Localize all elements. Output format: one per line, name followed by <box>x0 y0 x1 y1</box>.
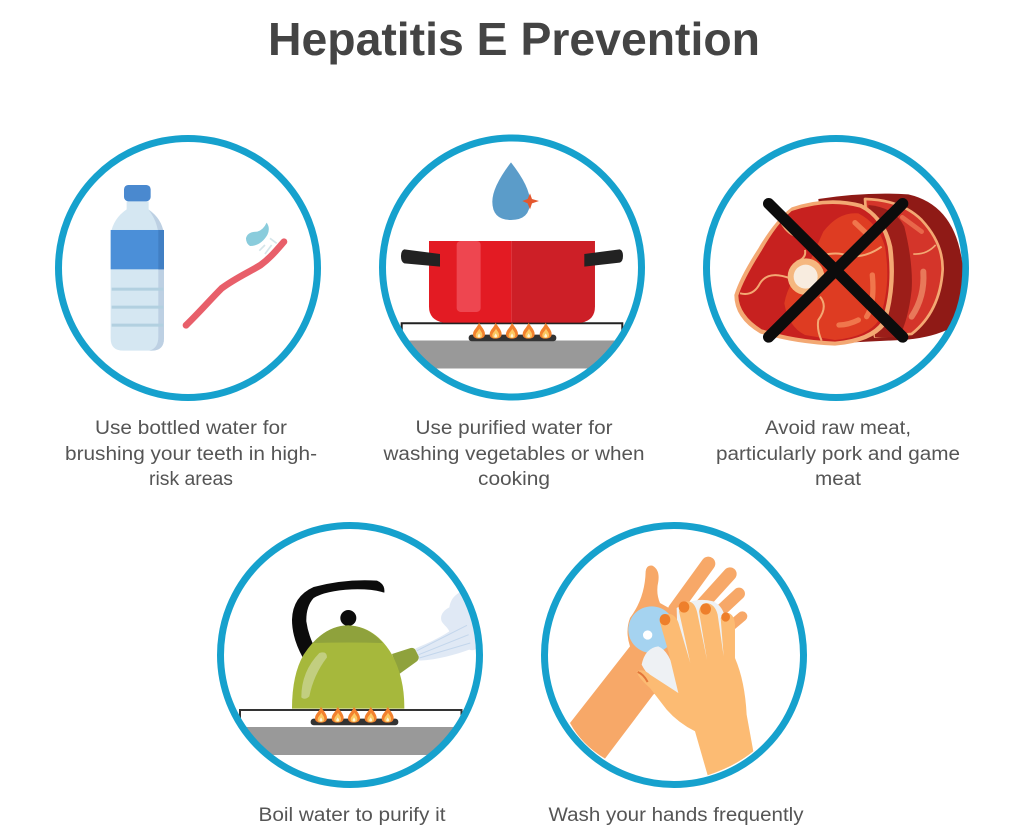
icon: burner flames <box>311 707 398 725</box>
caption: cooking <box>478 469 550 490</box>
panel: bottled water <box>58 138 318 490</box>
icon: steam <box>415 592 479 661</box>
caption <box>65 418 317 490</box>
icon ring <box>544 526 804 784</box>
caption <box>382 418 644 490</box>
caption: Avoid raw meat, <box>765 418 911 439</box>
icon ring <box>382 138 642 397</box>
caption: risk areas <box>149 469 233 490</box>
caption: particularly pork and game <box>716 444 960 465</box>
icon: soap <box>628 600 725 693</box>
caption: Use purified water for <box>416 418 613 439</box>
icon ring <box>58 138 318 398</box>
caption: Use bottled water for <box>95 418 288 439</box>
icon: black X <box>769 204 903 337</box>
panel: purified water <box>375 138 655 490</box>
icon: stove top <box>239 709 462 755</box>
caption: meat <box>815 469 862 490</box>
icon: water bottle <box>111 185 164 351</box>
icon: burner flames <box>469 323 556 341</box>
icon: meat <box>734 194 962 346</box>
icon: front hand <box>637 601 753 775</box>
icon: stove top <box>400 322 624 368</box>
panel: avoid raw meat <box>706 138 966 490</box>
icon: red pot <box>401 241 623 323</box>
icon ring <box>706 138 966 398</box>
caption <box>716 418 960 490</box>
caption: Boil water to purify it <box>258 805 446 826</box>
icon: back hand <box>570 564 742 759</box>
panel: boil water <box>212 526 492 826</box>
icon ring <box>220 526 480 784</box>
caption: washing vegetables or when <box>382 444 644 465</box>
icon: toothbrush <box>186 223 284 325</box>
icon: green kettle <box>292 580 419 709</box>
icon: water drop <box>492 162 539 220</box>
caption: Wash your hands frequently <box>548 805 804 826</box>
panel: wash hands <box>544 526 804 826</box>
caption: brushing your teeth in high- <box>65 444 317 465</box>
title: Hepatitis E Prevention <box>268 13 760 65</box>
